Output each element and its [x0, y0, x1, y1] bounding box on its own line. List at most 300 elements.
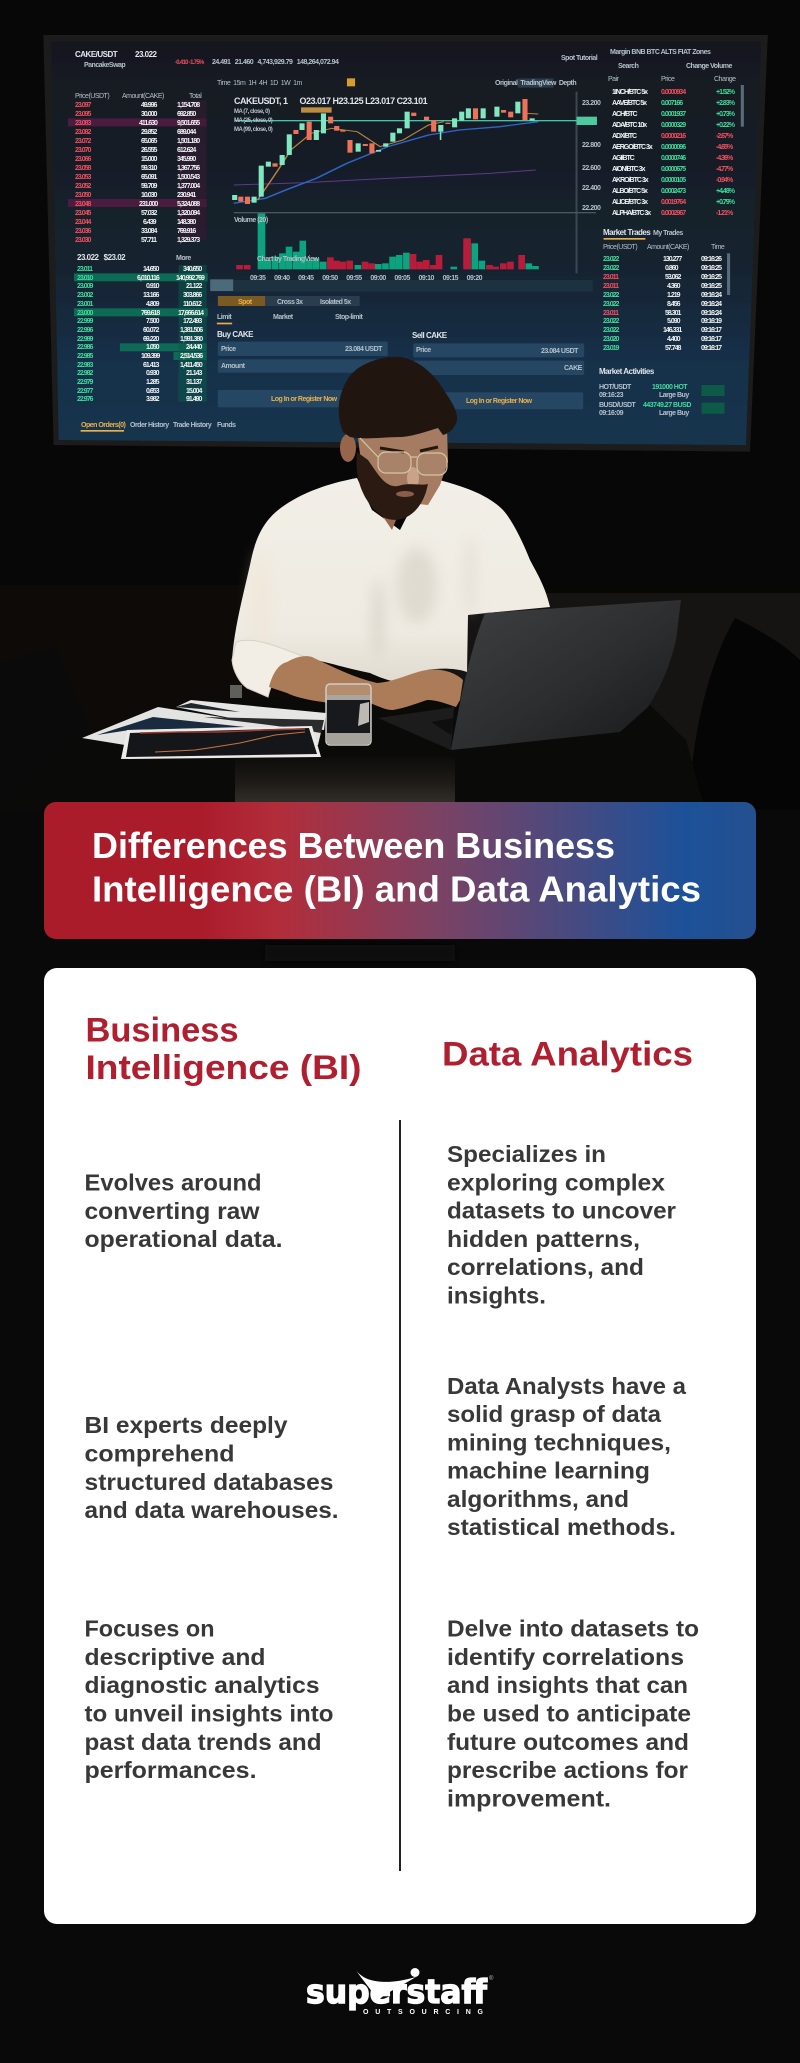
text: Data Analytics point 2: Data Analysts have a [447, 1373, 687, 1399]
order book: asks: 1,320.094 [177, 210, 200, 217]
shirt shading [252, 535, 476, 658]
market trades list: 23.022 [603, 327, 620, 334]
title [92, 825, 701, 910]
table reflection below banner [265, 945, 455, 961]
order book: bids: 31.137 [186, 379, 203, 386]
order book: bids: 22.976 [77, 396, 94, 403]
market pairs list: 0.0019764 [661, 199, 686, 206]
man, table and laptop scene [0, 357, 800, 810]
dashboard header text: Chart by TradingView [257, 256, 319, 263]
order book: asks: 49.996 [141, 102, 158, 109]
panel: comparison card [44, 968, 756, 1924]
market trades list: 53.062 [665, 274, 682, 281]
order book: bids: 4.809 [146, 301, 160, 308]
market trades list: 23.020 [603, 336, 620, 343]
order book: asks: 23.050 [75, 192, 92, 199]
volume bars [236, 213, 539, 269]
title: Intelligence (BI) and Data Analytics [92, 868, 701, 910]
order book: asks: 23.053 [75, 174, 92, 181]
dashboard header text: Spot Tutorial [561, 55, 598, 62]
order book: bids: 0.653 [146, 388, 160, 395]
text: BI point 3: diagnostic analytics [84, 1672, 320, 1698]
market pairs list: AGI/BTC [612, 155, 635, 162]
order book: bids: 769.618 [141, 310, 160, 317]
ear [340, 434, 356, 462]
dashboard header text: BUSD/USDT [599, 402, 637, 409]
dashboard header text: CAKEUSDT, 1 O23.017 H23.125 L23.017 C23.101 [234, 96, 428, 106]
market trades list: 146.331 [663, 327, 682, 334]
market trades list: 09:16:24 [701, 301, 722, 308]
order book: asks [75, 102, 200, 244]
dashboard header text: Buy CAKE [217, 330, 254, 339]
dashboard header text: Order History [130, 422, 169, 429]
order book: bids: 23.009 [77, 283, 94, 290]
dashboard header text: Total [189, 93, 202, 100]
order book: bids: 22.985 [77, 353, 94, 360]
beard [356, 452, 428, 520]
text: BI point 1: operational data. [84, 1226, 282, 1252]
market pairs list: +1.52% [716, 89, 736, 96]
market pairs list: 0.0002967 [661, 210, 686, 217]
dashboard header text: Price(USDT) [603, 244, 637, 251]
text: Data Analytics point 3: and insights that can [447, 1672, 688, 1698]
market pairs list: +0.79% [716, 199, 736, 206]
order book: bids: 1.050 [146, 344, 160, 351]
dashboard header text: More [176, 255, 191, 262]
market trades list: 23.011 [603, 283, 619, 290]
dashboard header text: Volume (20) [234, 217, 268, 224]
text: BI point 3 [84, 1616, 334, 1783]
market trades list: 5.090 [667, 318, 681, 325]
order book: asks: 769.916 [177, 228, 196, 235]
order book: bids: 172.493 [183, 318, 202, 325]
order book: bids: 0.930 [146, 370, 160, 377]
dashboard header text: 24.491 21.460 4,743,929.79 148,264,072.94 [212, 59, 339, 66]
market pairs list: AION/BTC 3x [612, 166, 646, 173]
text: Data Analytics point 3: identify correlations [447, 1644, 684, 1670]
dashboard header text: 23.022 $23.02 [77, 253, 126, 262]
order book: asks: 612.624 [177, 147, 196, 154]
dashboard header text: Log In or Register Now [466, 398, 533, 405]
order book: asks: 5,324.088 [177, 201, 200, 208]
market pairs list: AAVE/BTC 5x [612, 100, 647, 107]
market pairs list: -0.94% [716, 177, 734, 184]
order book: bids: 1,381.506 [180, 327, 203, 334]
market trades list: 09:16:17 [701, 345, 722, 352]
dashboard header text: 22.600 [582, 165, 601, 172]
dashboard header text: 23.022 [135, 50, 158, 59]
text: Data Analytics point 3: improvement. [447, 1786, 611, 1812]
dashboard header text: Price(USDT) [75, 93, 109, 100]
order book: asks: 231.000 [139, 201, 158, 208]
dashboard header text: 23.084 USDT [345, 346, 383, 353]
logo dot [410, 1968, 420, 1977]
order book: bids: 23.010 [77, 275, 94, 282]
order book: bids: 22.983 [77, 362, 94, 369]
right chair [689, 618, 800, 810]
dashboard header text: 09:16:09 [599, 410, 624, 417]
text: BI point 1: Evolves around [84, 1170, 262, 1196]
market pairs list: -2.67% [716, 133, 734, 140]
dashboard header text: Amount [221, 363, 246, 370]
order book: asks: 23.095 [75, 111, 92, 118]
logo wordmark: superstaff [306, 1972, 488, 2011]
dashboard header text: 09:35 09:40 09:45 09:50 09:55 09:00 09:05 09:10 09:15 09:20 [250, 275, 483, 282]
order book: asks: 65.091 [141, 174, 158, 181]
title banner [44, 802, 756, 939]
order book: bids: 22.979 [77, 379, 94, 386]
market pairs list: -4.77% [716, 166, 734, 173]
text: Data Analytics point 1: hidden patterns, [447, 1226, 640, 1252]
market trades list: 1.219 [667, 292, 681, 299]
text: BI point 3: Focuses on [84, 1616, 214, 1642]
market pairs list: ACH/BTC [612, 111, 637, 118]
text: BI point 3: to unveil insights into [84, 1700, 334, 1726]
market pairs list: -1.21% [716, 210, 734, 217]
market trades list: 09:16:17 [701, 336, 722, 343]
text: Data Analytics point 1: correlations, and [447, 1254, 644, 1280]
order book: bids [77, 266, 205, 403]
market pairs list: ALPHA/BTC 3x [612, 210, 651, 217]
dashboard header text: MA (99, close, 0) [234, 127, 273, 133]
order book: asks: 65.065 [141, 138, 158, 145]
order book: bids: 1,411.450 [180, 362, 203, 369]
order book: asks: 23.036 [75, 228, 92, 235]
registered mark: ® [489, 1975, 494, 1982]
text: BI point 3: descriptive and [84, 1644, 266, 1670]
logo: SuperStaff Outsourcing [306, 1968, 494, 2016]
photo: analyst at a laptop in front of a trading screen [0, 0, 800, 810]
market trades list: 09:16:26 [701, 256, 722, 263]
dashboard header text: Sell CAKE [412, 331, 448, 340]
order book: asks: 10.030 [141, 192, 158, 199]
market pairs list: +0.73% [716, 111, 736, 118]
market pairs list: +2.83% [716, 100, 736, 107]
dashboard header text: Market [273, 314, 294, 321]
order book: bids: 17,666.614 [178, 310, 204, 317]
order book: bids: 3.982 [146, 396, 160, 403]
order book: asks: 230.941 [177, 192, 196, 199]
market pairs list: 0.0000329 [661, 122, 686, 129]
market trades list: 09:16:24 [701, 310, 722, 317]
order book: asks: 29.852 [141, 129, 158, 136]
order book: asks: 57.032 [141, 210, 158, 217]
neck [365, 490, 404, 530]
text: Data Analytics point 3 [447, 1616, 699, 1812]
order book: asks: 1,501.180 [177, 138, 200, 145]
printed charts on the table [82, 700, 326, 759]
order book: bids: 23.000 [77, 310, 94, 317]
text: Data Analytics point 2: solid grasp of data [447, 1401, 662, 1427]
order book: bids: 22.977 [77, 388, 94, 395]
market trades list: 09:16:24 [701, 292, 722, 299]
text: BI point 1: converting raw [84, 1198, 260, 1224]
market pairs list: ADX/BTC [612, 133, 637, 140]
dashboard header text: CAKE/USDT [75, 50, 118, 59]
order book: bids: 13.166 [143, 292, 160, 299]
column divider [399, 1120, 401, 1871]
dashboard header text: 23.200 [582, 100, 601, 107]
market trades list: 57.748 [665, 345, 682, 352]
order book: bids: 110.612 [183, 301, 202, 308]
eyebrows [380, 447, 438, 452]
market pairs list: ALICE/BTC 3x [612, 199, 648, 206]
dashboard header text: Time [711, 244, 725, 251]
title: Differences Between Business [92, 825, 615, 866]
market trades list: 23.011 [603, 310, 619, 317]
order book: asks: 689.044 [177, 129, 196, 136]
wall [0, 0, 800, 810]
market pairs list: 0.0000746 [661, 155, 686, 162]
order book: bids: 303.866 [183, 292, 202, 299]
order book: asks: 23.082 [75, 129, 92, 136]
order book: asks: 33.084 [141, 228, 158, 235]
dashboard header text: 443749.27 BUSD [643, 402, 691, 409]
candlestick chart [232, 99, 535, 204]
text: BI point 2: and data warehouses. [84, 1497, 338, 1523]
order book: asks: 23.058 [75, 165, 92, 172]
dashboard header text [75, 49, 736, 429]
lips [396, 491, 414, 497]
text: Data Analytics point 1 [447, 1141, 676, 1308]
order book: asks: 23.070 [75, 147, 92, 154]
order book: asks: 148.380 [177, 219, 196, 226]
market trades list: 23.022 [603, 292, 620, 299]
dashboard header text: Market Trades [603, 228, 651, 237]
order book: asks: 1,377.004 [177, 183, 200, 190]
market pairs list: 0.0000216 [661, 133, 686, 140]
heading: Data Analytics: Data Analytics [442, 1036, 693, 1074]
order book: asks: 30.000 [141, 111, 158, 118]
order book: asks: 26.555 [141, 147, 158, 154]
order book: bids: 22.996 [77, 327, 94, 334]
dashboard header text: Amount(CAKE) [647, 244, 689, 251]
market trades list: 09:16:25 [701, 274, 722, 281]
left chair [0, 647, 89, 810]
text: BI point 2: comprehend [84, 1440, 234, 1466]
market pairs list: 0.0000675 [661, 166, 686, 173]
order book: bids: 340.650 [183, 266, 202, 273]
order book: asks: 1,500.543 [177, 174, 200, 181]
dashboard header text: HOT/USDT [599, 384, 632, 391]
market trades list: 09:16:19 [701, 318, 722, 325]
order book: asks: 692.850 [177, 111, 196, 118]
market pairs list: AKRO/BTC 3x [612, 177, 649, 184]
dashboard header text: PancakeSwap [84, 62, 125, 69]
order book: asks: 6.439 [143, 219, 157, 226]
order book: asks: 23.072 [75, 138, 92, 145]
dashboard header text: Spot [238, 299, 253, 306]
order book: bids: 21.122 [186, 283, 203, 290]
order book: asks: 1,367.756 [177, 165, 200, 172]
market pairs list: 0.0000934 [661, 89, 686, 96]
order book: bids: 7.500 [146, 318, 160, 325]
shirt [232, 477, 550, 697]
dashboard header text: Cross 3x [277, 299, 303, 306]
face [358, 427, 448, 505]
order book: bids: 140,992.769 [176, 275, 205, 282]
market pairs list: -4.65% [716, 144, 734, 151]
market pairs list: 0.0000105 [661, 177, 686, 184]
water glass [326, 684, 371, 745]
logo swoosh [356, 1970, 416, 2001]
market trades list: 0.860 [665, 265, 679, 272]
market trades list: 23.022 [603, 301, 620, 308]
market pairs list: 1INCH/BTC 5x [612, 89, 648, 96]
order book: bids: 23.002 [77, 292, 94, 299]
market pairs list: ADA/BTC 10x [612, 122, 647, 129]
text: Data Analytics point 1: Specializes in [447, 1141, 606, 1167]
order book: bids: 24.440 [186, 344, 203, 351]
dashboard header text: Limit [217, 314, 232, 321]
table reflection [235, 757, 455, 807]
dashboard header text: 191000 HOT [652, 384, 688, 391]
dashboard header text: Price [221, 346, 236, 353]
text: BI point 1 [84, 1170, 282, 1252]
dashboard header text: Isolated 5x [320, 299, 351, 306]
market pairs list: AERGO/BTC 3x [612, 144, 653, 151]
market pairs list: 0.0000096 [661, 144, 686, 151]
order book: asks: 9,501.655 [177, 120, 200, 127]
order book: asks: 23.048 [75, 201, 92, 208]
rolled cuff [232, 640, 308, 697]
heading: Business Intelligence (BI) [86, 1012, 362, 1087]
dashboard header text: 23.084 USDT [541, 348, 579, 355]
forearm and hand [269, 656, 463, 710]
heading: Business Intelligence (BI): Intelligence (BI) [86, 1049, 362, 1087]
market pairs list: +0.22% [716, 122, 736, 129]
text: Data Analytics point 1: exploring complex [447, 1170, 665, 1196]
order book: bids: 69.220 [143, 336, 160, 343]
dashboard header text: Market Activities [599, 367, 655, 376]
dashboard header text: MA (7, close, 0) [234, 109, 270, 115]
dashboard header text: CAKE [564, 365, 583, 372]
text: Data Analytics point 3: be used to anticipate [447, 1700, 691, 1726]
market trades list: 23.011 [603, 274, 619, 281]
dashboard header text: Pair [608, 76, 620, 83]
market pairs list: +4.48% [716, 188, 736, 195]
glasses [360, 438, 447, 475]
market trades list: 58.301 [665, 310, 682, 317]
dashboard header text: Trade History [173, 422, 212, 429]
order book: bids: 22.999 [77, 318, 94, 325]
order book: bids: 21.143 [186, 370, 203, 377]
monitor with trading dashboard [43, 35, 768, 452]
dashboard header text: Log In or Register Now [271, 396, 338, 403]
market trades list: 8.456 [667, 301, 681, 308]
market pairs list: ALBO/BTC 5x [612, 188, 648, 195]
order book: asks: 23.030 [75, 237, 92, 244]
order book: asks: 57.711 [141, 237, 157, 244]
order book: bids: 60.072 [143, 327, 160, 334]
market pairs list: 0.0001937 [661, 111, 686, 118]
nose highlight [407, 467, 419, 489]
text: BI point 3: past data trends and [84, 1729, 322, 1755]
market trades list: 09:16:17 [701, 327, 722, 334]
dashboard header text: Change [714, 76, 736, 83]
dashboard header text: Open Orders(0) [81, 422, 126, 429]
heading: Business Intelligence (BI): Business [86, 1012, 238, 1050]
hair [339, 357, 457, 438]
market trades list: 09:16:25 [701, 265, 722, 272]
text: BI point 2: BI experts deeply [84, 1412, 288, 1438]
dashboard header text: Large Buy [659, 410, 689, 417]
dashboard header text: Amount(CAKE) [122, 93, 164, 100]
market pairs list: 0.0002473 [661, 188, 686, 195]
text: Data Analytics point 2: statistical methods. [447, 1514, 676, 1540]
text: Data Analytics point 2: mining techniques, [447, 1430, 671, 1456]
order book: bids: 1,591.380 [180, 336, 203, 343]
order book: bids: 1.285 [146, 379, 160, 386]
market trades list [603, 256, 722, 352]
order book: asks: 1,329.373 [177, 237, 200, 244]
order book: bids: 22.986 [77, 344, 94, 351]
dashboard header text: Margin BNB BTC ALTS FIAT Zones [610, 49, 711, 56]
dashboard header text: MA (25, close, 0) [234, 118, 273, 124]
dashboard header text: Funds [217, 422, 236, 429]
market trades list: 23.022 [603, 318, 620, 325]
text: Data Analytics point 3: future outcomes and [447, 1729, 689, 1755]
order book: asks: 23.045 [75, 210, 92, 217]
market trades list: 4.400 [667, 336, 681, 343]
order book: bids: 61.413 [143, 362, 160, 369]
order book: asks: 59.310 [141, 165, 158, 172]
order book: bids: 22.989 [77, 336, 94, 343]
order book: asks: 23.083 [75, 120, 92, 127]
market trades list: 09:16:25 [701, 283, 722, 290]
market pairs list: -4.36% [716, 155, 734, 162]
order book: asks: 23.052 [75, 183, 92, 190]
dashboard header text: 22.400 [582, 185, 601, 192]
dashboard header text: 22.800 [582, 142, 601, 149]
dashboard header text: Search [618, 63, 639, 70]
order book: bids: 0.910 [146, 283, 160, 290]
order book: bids: 23.001 [77, 301, 94, 308]
order book: bids: 91.490 [186, 396, 203, 403]
market pairs list [612, 89, 736, 217]
market trades list: 4.360 [667, 283, 681, 290]
dashboard header text: Original TradingView Depth [495, 80, 576, 87]
text: Data Analytics point 3: prescribe actions for [447, 1757, 688, 1783]
text: BI point 3: performances. [84, 1757, 256, 1783]
text: Data Analytics point 2 [447, 1373, 687, 1540]
text: Data Analytics point 2: machine learning [447, 1458, 650, 1484]
order book: asks: 23.097 [75, 102, 92, 109]
order book: asks: 1,154.708 [177, 102, 200, 109]
text: Data Analytics point 1: insights. [447, 1282, 546, 1308]
text: BI point 2: structured databases [84, 1469, 334, 1495]
dashboard header text: Time 15m 1H 4H 1D 1W 1m [217, 80, 302, 87]
market trades list: 23.022 [603, 256, 620, 263]
dashboard header text: Change Volume [686, 63, 732, 70]
order book: bids: 15.004 [186, 388, 203, 395]
dashboard header text: Stop-limit [335, 314, 363, 321]
order book: asks: 411.630 [139, 120, 158, 127]
market pairs list: 0.007166 [661, 100, 683, 107]
order book: asks: 23.044 [75, 219, 92, 226]
order book: bids: 2,514.536 [180, 353, 203, 360]
order book: asks: 59.709 [141, 183, 158, 190]
dashboard header text: Price [416, 347, 431, 354]
order book: bids: 23.011 [77, 266, 93, 273]
market trades list: 23.022 [603, 265, 620, 272]
dashboard header text: My Trades [653, 230, 683, 237]
text: Data Analytics point 3: Delve into datasets to [447, 1616, 699, 1642]
dashboard header text: 09:16:23 [599, 392, 624, 399]
logo tagline: OUTSOURCING [363, 2009, 484, 2016]
order book: bids: 109.399 [141, 353, 160, 360]
laptop [378, 600, 681, 750]
